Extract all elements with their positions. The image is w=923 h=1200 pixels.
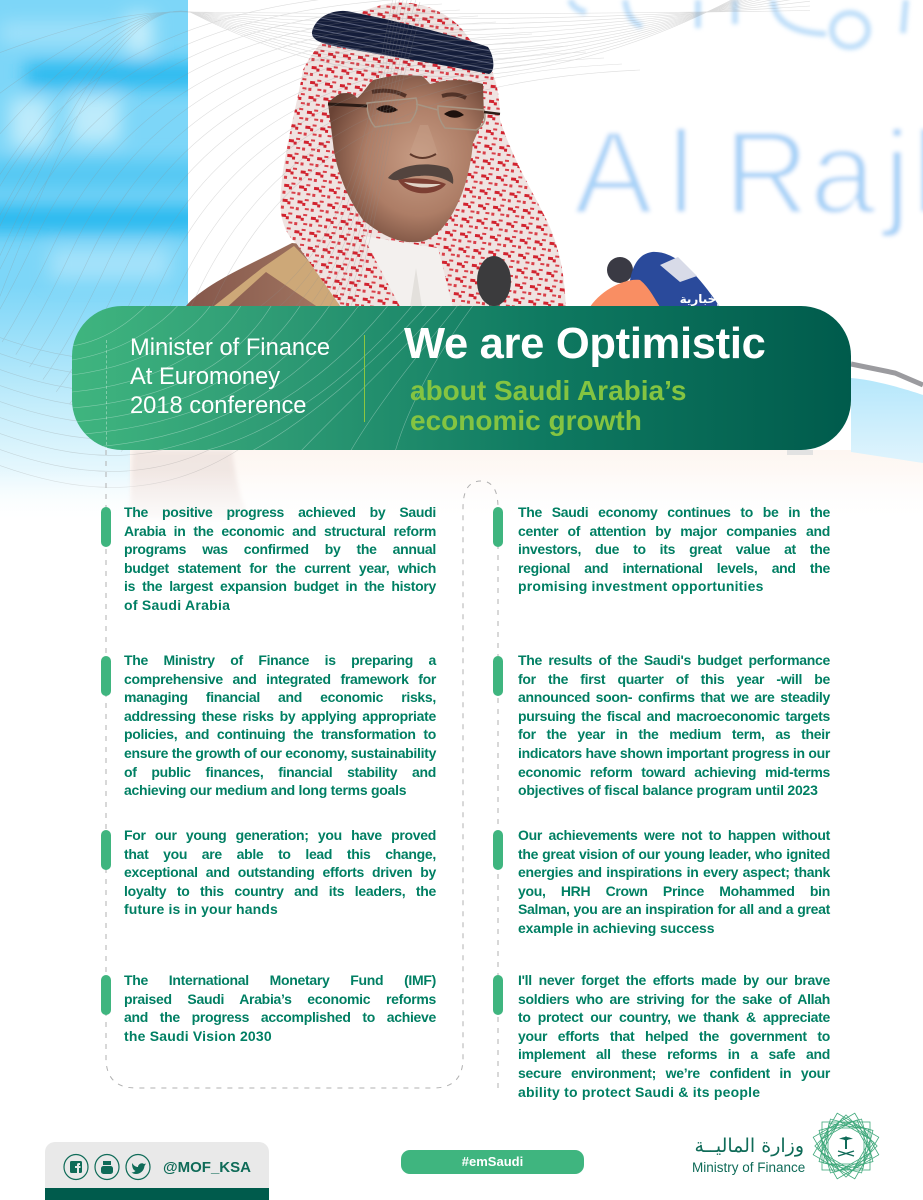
text block: IMF <box>124 972 436 1044</box>
blue blurred screen on the left <box>0 0 188 494</box>
text block: soldiers: I'll never forget the efforts made by our brave <box>518 972 830 988</box>
blurred sponsor lettering backdrop <box>570 0 923 239</box>
right column markers <box>493 507 503 1015</box>
english wordmark: Ministry of Finance <box>692 1160 805 1175</box>
eyes and glasses <box>328 91 500 130</box>
text block: risk framework: comprehensive and integrated framework for <box>124 671 436 687</box>
text block: budget performance: for the year in the medium term, as their <box>518 726 830 742</box>
speaker <box>183 3 722 320</box>
photo background and speaker <box>0 0 923 510</box>
black headband <box>312 11 493 74</box>
text block: soldiers <box>518 972 830 1100</box>
banner contour lines <box>72 306 473 450</box>
text block: crown prince <box>518 827 830 936</box>
footer band <box>45 1188 269 1200</box>
text block: young generation: exceptional and outstanding efforts driven by <box>124 864 436 880</box>
stage and lower backdrop <box>130 364 923 520</box>
text block: crown prince: energies and inspirations in every aspect; thank <box>518 864 830 880</box>
centre microphone <box>489 280 499 310</box>
emblem <box>812 1112 880 1180</box>
text block: young generation: future is in your hands <box>124 901 278 917</box>
text block: risk framework: achieving our medium and long terms goals <box>124 782 406 798</box>
headdress <box>280 3 566 320</box>
text block: risk framework <box>124 652 436 798</box>
banner <box>72 306 851 450</box>
banner left text: event: 2018 conference <box>130 393 306 419</box>
text block: centre of attention: The Saudi economy continues to be in the <box>518 504 830 520</box>
text block: IMF: and the progress accomplished to achieve <box>124 1009 436 1025</box>
text block: soldiers: implement all these reforms in a safe and <box>518 1046 830 1062</box>
text block: young generation: that you are able to lead this change, <box>124 846 436 862</box>
text block: budget statement: is the largest expansion budget in the history <box>124 578 436 594</box>
text block: IMF: The International Monetary Fund (IMF) <box>124 972 436 988</box>
news microphones: إخبارية <box>680 292 720 306</box>
text block: budget performance: pursuing the fiscal and macroeconomic targets <box>518 708 830 724</box>
text block: budget statement: programs was confirmed by the annual <box>124 541 436 557</box>
text block: soldiers: secure environment; we’re confident in your <box>518 1065 830 1081</box>
banner subtitle: economic growth <box>410 405 642 436</box>
separator <box>364 335 365 422</box>
moustache and mouth <box>388 125 453 193</box>
text block: budget performance: for the first quarter of this year -will be <box>518 671 830 687</box>
news microphones <box>588 252 722 310</box>
white thobe collar <box>360 232 460 320</box>
text block: soldiers: to protect our country, we thank & appreciate <box>518 1009 830 1025</box>
text block: budget statement: of Saudi Arabia <box>124 597 230 613</box>
text block: crown prince: example in achieving success <box>518 920 714 936</box>
right drape fold <box>445 84 540 250</box>
text block: centre of attention <box>518 504 830 594</box>
dashed line over banner <box>106 340 107 450</box>
face <box>328 75 484 242</box>
banner subtitle <box>410 375 686 436</box>
social handle: @MOF_KSA <box>163 1159 251 1176</box>
arabic wordmark: وزارة الماليــة <box>695 1135 804 1157</box>
text block: crown prince: the great vision of our young leader, who ignited <box>518 846 830 862</box>
text block: soldiers: ability to protect Saudi & its people <box>518 1084 760 1100</box>
text block: soldiers: your efforts that helped the government to <box>518 1028 830 1044</box>
text block: soldiers: soldiers who are striving for the sake of Allah <box>518 991 830 1007</box>
headdress brow fold <box>312 62 492 98</box>
contour line background <box>0 0 810 540</box>
text block: centre of attention: center of attention by major companies and <box>518 523 830 539</box>
text block: young generation <box>124 827 436 917</box>
dashed connector line <box>106 450 498 1088</box>
text block: budget performance <box>518 652 830 798</box>
text block: risk framework: The Ministry of Finance is preparing a <box>124 652 436 668</box>
left column markers <box>101 507 111 1015</box>
text block: budget statement: The positive progress achieved by Saudi <box>124 504 436 520</box>
text block: crown prince: Salman, you are an inspiration for all and a great <box>518 901 830 917</box>
text block: risk framework: of public finances, financial stability and <box>124 764 436 780</box>
ministry logo <box>692 1112 880 1180</box>
text block: crown prince: Our achievements were not to happen without <box>518 827 830 843</box>
text block: budget performance: announced soon- confirms that we are steadily <box>518 689 830 705</box>
text block: risk framework: ensure the growth of our economy, sustainability <box>124 745 436 761</box>
social panel <box>45 1142 269 1200</box>
text block: centre of attention: regional and international levels, and the <box>518 560 830 576</box>
social icons <box>63 1154 151 1180</box>
text block: young generation: For our young generation; you have proved <box>124 827 436 843</box>
text block: budget statement <box>124 504 436 613</box>
text block: budget performance: economic reform toward achieving mid-terms <box>518 764 830 780</box>
robe <box>183 243 420 320</box>
text block: IMF: praised Saudi Arabia’s economic reforms <box>124 991 436 1007</box>
text block: budget performance: The results of the Saudi's budget performance <box>518 652 830 668</box>
banner left text: event: At Euromoney <box>130 364 280 390</box>
text block: budget statement: Arabia in the economic and structural reform <box>124 523 436 539</box>
text block: budget statement: budget statement for the current year, which <box>124 560 436 576</box>
hashtag pill: #emSaudi <box>462 1154 523 1169</box>
text block: young generation: loyalty to this country and its leaders, the <box>124 883 436 899</box>
text block: risk framework: managing financial and economic risks, <box>124 689 436 705</box>
text block: risk framework: policies, and continuing the transformation to <box>124 726 436 742</box>
hashtag pill <box>401 1150 584 1174</box>
text block: risk framework: addressing these risks by applying appropriate <box>124 708 436 724</box>
banner left text: event <box>130 335 330 419</box>
text block: IMF: the Saudi Vision 2030 <box>124 1028 272 1044</box>
text block: centre of attention: investors, due to its great value at the <box>518 541 830 557</box>
banner left text: event: Minister of Finance <box>130 335 330 361</box>
text block: budget performance: objectives of fiscal balance program until 2023 <box>518 782 818 798</box>
text block: budget performance: indicators have shown important progress in our <box>518 745 830 761</box>
banner title: We are Optimistic <box>404 320 766 368</box>
banner subtitle: about Saudi Arabia’s <box>410 375 686 406</box>
text block: crown prince: you, HRH Crown Prince Mohammed bin <box>518 883 830 899</box>
text block: centre of attention: promising investment opportunities <box>518 578 764 594</box>
